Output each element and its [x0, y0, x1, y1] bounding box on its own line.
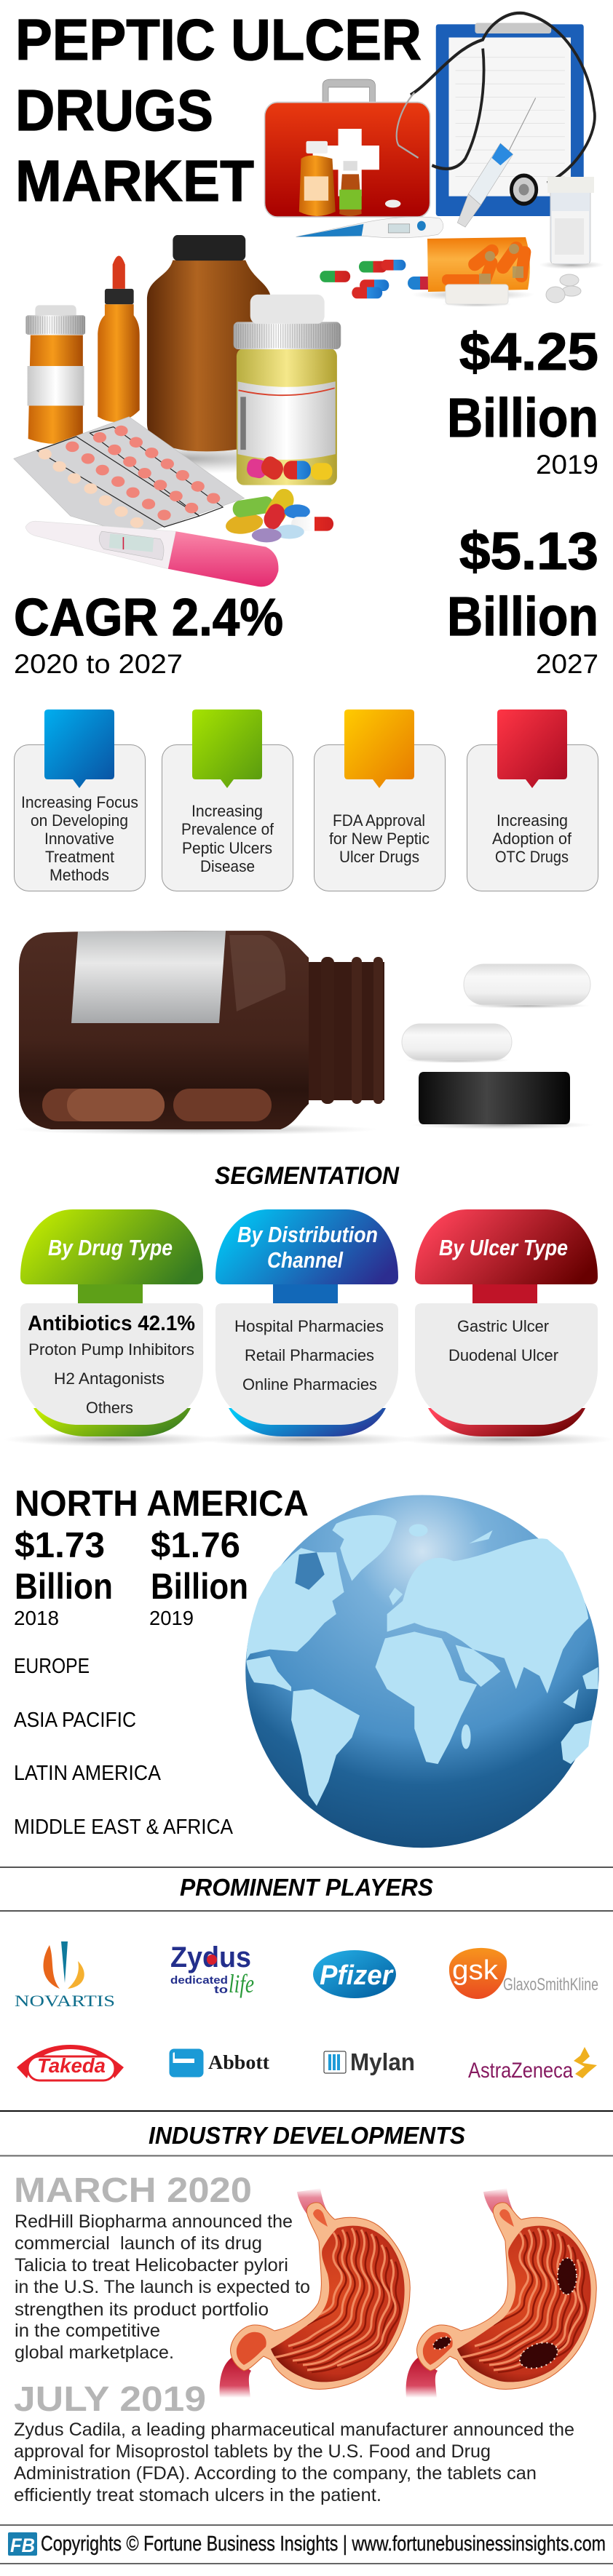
market value 2019: 2019 — [536, 450, 598, 480]
logo: Mylan — [324, 2048, 415, 2075]
logo: Takeda — [17, 2045, 124, 2080]
region list: MIDDLE EAST & AFRICA — [14, 1816, 234, 1839]
panel: driver 2: Peptic Ulcers — [182, 839, 272, 857]
region: North America: Billion — [15, 1566, 113, 1607]
region: North America: 2019 — [149, 1607, 194, 1629]
panel: by drug type: H2 Antagonists — [54, 1370, 165, 1388]
footer — [0, 2525, 613, 2564]
logo: Abbott — [171, 2051, 269, 2075]
panel: driver 4: OTC Drugs — [495, 848, 569, 866]
panel: driver 4: Increasing — [497, 811, 568, 830]
heading: prominent players: PROMINENT PLAYERS — [180, 1874, 433, 1901]
logo: GSK — [449, 1948, 598, 1999]
panel: by ulcer type: By Ulcer Type — [439, 1235, 568, 1260]
panel: driver 2: Prevalence of — [181, 820, 274, 838]
panel: by distribution channel — [199, 1209, 414, 1447]
market value 2019: Billion — [447, 387, 598, 448]
region: North America: Billion — [151, 1566, 248, 1607]
CAGR: 2020 to 2027 — [14, 649, 183, 679]
logo: AstraZeneca: AstraZeneca — [468, 2059, 573, 2083]
development: March 2020: strengthen its product portfolio — [15, 2299, 269, 2320]
panel: driver 1: Increasing Focus — [21, 793, 138, 811]
illustration: stomach healthy and ulcerated — [220, 2188, 596, 2398]
region: North America: NORTH AMERICA — [15, 1483, 309, 1524]
illustration: medicine bottles and blister pack — [12, 235, 341, 587]
market value 2019: $4.25 — [459, 323, 598, 381]
title: PEPTIC ULCER — [15, 7, 422, 72]
illustration: bottle cap — [411, 1072, 593, 1129]
heading: prominent players — [0, 1867, 613, 1911]
development: July 2019: Administration (FDA). According to the company, the tablets can — [14, 2463, 537, 2484]
panel: driver 1: Methods — [50, 866, 109, 884]
logo: Zydus — [170, 1941, 254, 1998]
region: North America: $1.76 — [151, 1526, 240, 1565]
development: March 2020: in the U.S. The launch is expected to — [15, 2277, 310, 2297]
pills heap — [224, 485, 333, 542]
region list: LATIN AMERICA — [14, 1762, 162, 1785]
market value 2027 — [447, 522, 598, 679]
panel: driver 3: FDA Approval — [333, 811, 425, 830]
panel: driver 3: for New Peptic — [329, 830, 430, 848]
panel: by ulcer type — [398, 1209, 613, 1447]
icon: thermometer — [296, 217, 443, 238]
illustration: first aid kit, clipboard and pills — [265, 13, 595, 298]
panel: by ulcer type: Gastric Ulcer — [457, 1317, 549, 1335]
region list: ASIA PACIFIC — [14, 1709, 136, 1732]
logo: Pfizer — [313, 1950, 396, 1998]
icon: test stick — [25, 521, 278, 587]
icon: stethoscope — [397, 13, 595, 204]
panel: by distribution channel: By Distribution — [237, 1222, 378, 1247]
panel: by distribution channel: Channel — [267, 1247, 344, 1273]
logo: Novartis: NOVARTIS — [15, 1992, 115, 2010]
logo: Zydus: dedicated — [170, 1974, 228, 1987]
title: DRUGS — [15, 78, 213, 143]
heading: segmentation: SEGMENTATION — [215, 1162, 400, 1190]
title: MARKET — [15, 148, 254, 213]
development: March 2020: RedHill Biopharma announced the — [15, 2211, 293, 2232]
panel: by drug type — [4, 1209, 219, 1447]
panel: by ulcer type: Duodenal Ulcer — [448, 1346, 558, 1364]
logo: Takeda: Takeda — [37, 2054, 106, 2077]
logo: Zydus: Zydus — [170, 1941, 251, 1973]
panel: by drug type: By Drug Type — [48, 1235, 173, 1260]
development: March 2020 — [14, 2171, 310, 2363]
development: March 2020: commercial launch of its drug — [15, 2233, 262, 2254]
development: March 2020: global marketplace. — [15, 2342, 174, 2363]
panel: driver 1: Treatment — [45, 848, 114, 866]
panel: driver 4: Adoption of — [492, 830, 572, 848]
development: March 2020: Talicia to treat Helicobacter pylori — [15, 2255, 288, 2275]
blister pack — [14, 417, 245, 536]
panel: driver 1 — [15, 709, 146, 891]
illustration: brown bottle on its side — [15, 931, 384, 1135]
development: July 2019: efficiently treat stomach ulcers in the patient. — [14, 2485, 381, 2505]
logo: Mylan: Mylan — [350, 2048, 415, 2075]
panel: driver 1: Innovative — [44, 830, 114, 848]
logo: Pfizer: Pfizer — [320, 1960, 394, 1991]
market value 2019 — [447, 323, 598, 480]
CAGR: CAGR 2.4% — [14, 589, 283, 647]
development: March 2020: in the competitive — [15, 2321, 160, 2341]
illustration: globe — [245, 1495, 599, 1848]
market value 2027: 2027 — [536, 649, 598, 679]
development: July 2019: JULY 2019 — [14, 2380, 206, 2419]
panel: by drug type: Others — [86, 1399, 133, 1417]
development: July 2019 — [14, 2380, 574, 2505]
region: North America: 2018 — [14, 1607, 59, 1629]
illustration: pill jar, tipped orange bottle, tablets — [408, 177, 604, 307]
logo: Zydus: to — [214, 1984, 228, 1996]
panel: by distribution channel: Online Pharmacies — [242, 1375, 377, 1394]
panel: driver 2: Disease — [200, 857, 255, 875]
panel: driver 3: Ulcer Drugs — [339, 848, 419, 866]
region: North America — [14, 1483, 309, 1629]
region list — [14, 1655, 234, 1839]
region list: EUROPE — [14, 1655, 90, 1678]
panel: driver 4 — [467, 709, 598, 891]
development: July 2019: Zydus Cadila, a leading pharmaceutical manufacturer announced the — [14, 2420, 574, 2440]
panel: driver 1: on Developing — [31, 811, 128, 830]
panel: by distribution channel: Retail Pharmacies — [245, 1346, 374, 1364]
logo: Abbott: Abbott — [208, 2051, 269, 2073]
panel: by drug type: Proton Pump Inhibitors — [28, 1340, 194, 1359]
title — [15, 7, 422, 213]
logo: GSK: gsk — [452, 1955, 499, 1986]
icon: syringe — [457, 98, 536, 227]
logo: Novartis — [15, 1941, 115, 2010]
CAGR — [14, 589, 283, 679]
panel: driver 2 — [162, 709, 293, 891]
logo: AstraZeneca — [468, 2047, 597, 2083]
panel: by drug type: Antibiotics 42.1% — [28, 1312, 195, 1335]
logo: Zydus: life — [229, 1969, 254, 1998]
footer: FB — [10, 2535, 35, 2556]
panel: driver 2: Increasing — [191, 802, 263, 820]
panel: by distribution channel: Hospital Pharmacies — [234, 1317, 384, 1335]
region: North America: $1.73 — [15, 1526, 105, 1565]
development: July 2019: approval for Misoprostol tablets by the U.S. Food and Drug — [14, 2441, 491, 2462]
market value 2027: $5.13 — [459, 522, 598, 581]
panel: driver 3 — [315, 709, 446, 891]
illustration: white capsules — [402, 964, 590, 1063]
heading: industry developments: INDUSTRY DEVELOPMENTS — [149, 2122, 465, 2149]
development: March 2020: MARCH 2020 — [14, 2171, 252, 2210]
market value 2027: Billion — [447, 586, 598, 647]
